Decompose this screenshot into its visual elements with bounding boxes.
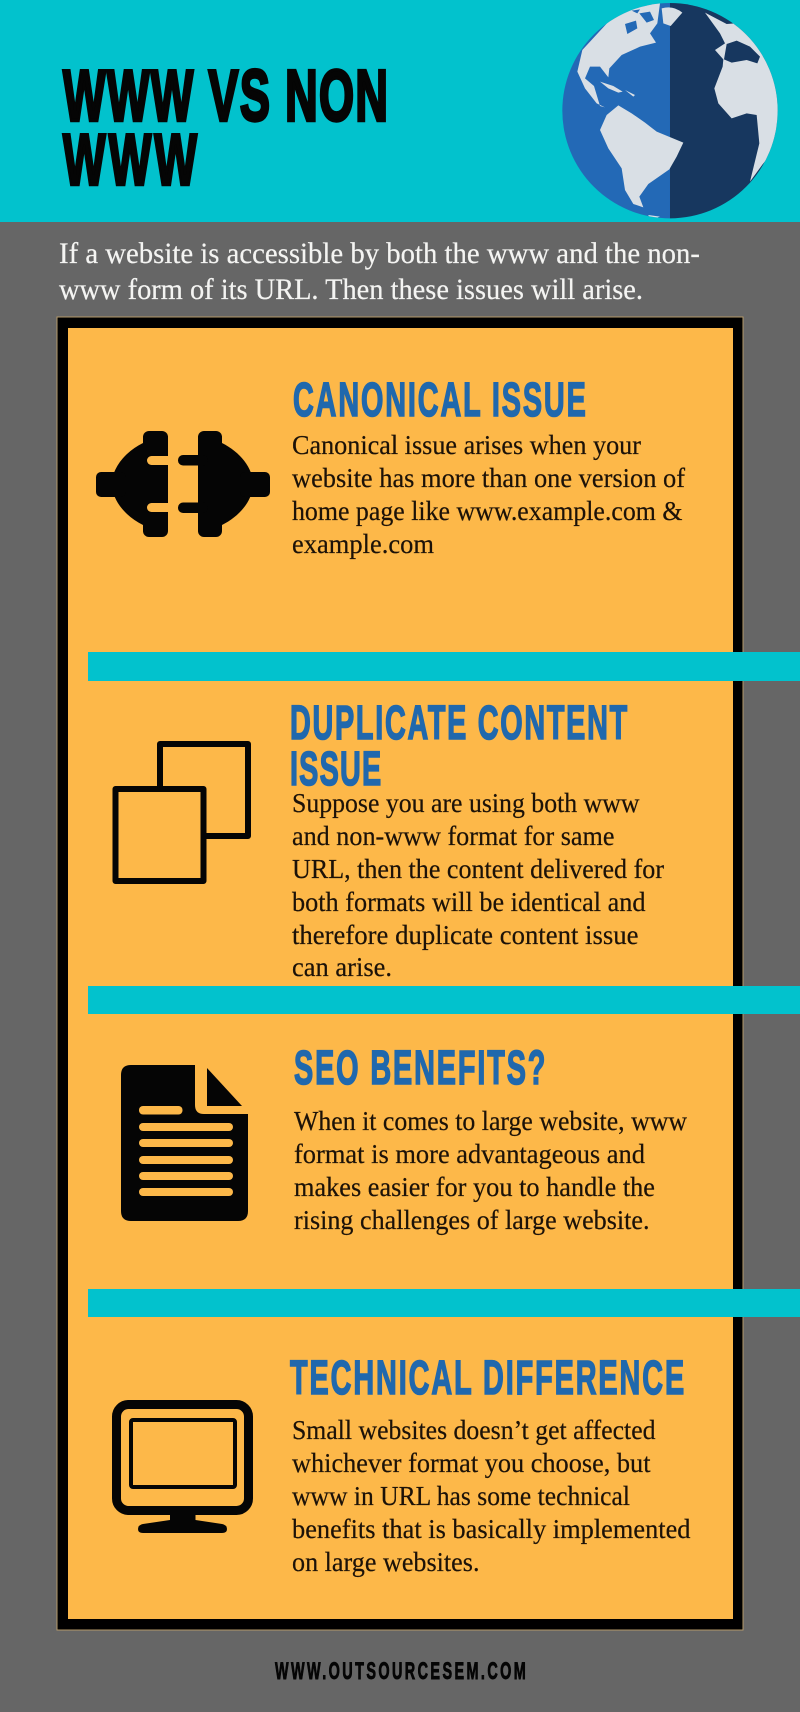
title: WWW bbox=[63, 118, 198, 200]
text: seo benefits body bbox=[294, 1106, 687, 1235]
text: duplicate content body bbox=[292, 788, 664, 982]
intro text bbox=[59, 237, 700, 306]
text: technical difference body: Small websites doesn’t get affected bbox=[292, 1415, 656, 1445]
heading: duplicate content issue bbox=[290, 697, 627, 796]
heading: duplicate content issue: ISSUE bbox=[290, 743, 381, 796]
text: duplicate content body: and non-www format for same bbox=[292, 821, 615, 851]
heading: canonical issue: CANONICAL ISSUE bbox=[293, 374, 586, 427]
heading: technical difference: TECHNICAL DIFFERENCE bbox=[290, 1352, 684, 1405]
text: duplicate content body: therefore duplicate content issue bbox=[292, 920, 639, 950]
header band bbox=[0, 0, 800, 222]
text: canonical issue body: home page like www.example.com & bbox=[292, 496, 682, 526]
divider bar 1 bbox=[88, 652, 800, 681]
title bbox=[63, 54, 388, 200]
icon: plug bbox=[96, 431, 270, 537]
title: WWW VS NON bbox=[63, 54, 388, 136]
text: duplicate content body: URL, then the content delivered for bbox=[292, 854, 664, 884]
text: technical difference body: www in URL has some technical bbox=[292, 1481, 630, 1511]
text: duplicate content body: both formats will be identical and bbox=[292, 887, 646, 917]
text: technical difference body bbox=[292, 1415, 691, 1577]
text: canonical issue body: example.com bbox=[292, 529, 434, 559]
text: technical difference body: whichever format you choose, but bbox=[292, 1448, 651, 1478]
text: canonical issue body: website has more than one version of bbox=[292, 463, 685, 493]
icon: monitor bbox=[116, 1404, 248, 1533]
text: duplicate content body: can arise. bbox=[292, 952, 392, 982]
text: technical difference body: on large websites. bbox=[292, 1547, 480, 1577]
heading: duplicate content issue: DUPLICATE CONTENT bbox=[290, 697, 627, 750]
footer url: WWW.OUTSOURCESEM.COM bbox=[275, 1658, 526, 1685]
icon: globe bbox=[560, 0, 783, 223]
icon: overlapping squares bbox=[116, 744, 248, 881]
intro text: If a website is accessible by both the www and the non- bbox=[59, 237, 700, 270]
text: seo benefits body: rising challenges of large website. bbox=[294, 1205, 650, 1235]
text: seo benefits body: format is more advantageous and bbox=[294, 1139, 645, 1169]
heading: seo benefits: SEO BENEFITS? bbox=[294, 1042, 545, 1095]
text: seo benefits body: makes easier for you to handle the bbox=[294, 1172, 655, 1202]
text: technical difference body: benefits that is basically implemented bbox=[292, 1514, 691, 1544]
text: duplicate content body: Suppose you are using both www bbox=[292, 788, 640, 818]
intro text: www form of its URL. Then these issues will arise. bbox=[59, 273, 643, 306]
divider bar 3 bbox=[88, 1289, 800, 1317]
text: canonical issue body: Canonical issue arises when your bbox=[292, 430, 641, 460]
main panel bbox=[57, 317, 743, 1630]
divider bar 2 bbox=[88, 986, 800, 1014]
icon: document bbox=[121, 1065, 248, 1221]
text: seo benefits body: When it comes to large website, www bbox=[294, 1106, 687, 1136]
text: canonical issue body bbox=[292, 430, 685, 559]
